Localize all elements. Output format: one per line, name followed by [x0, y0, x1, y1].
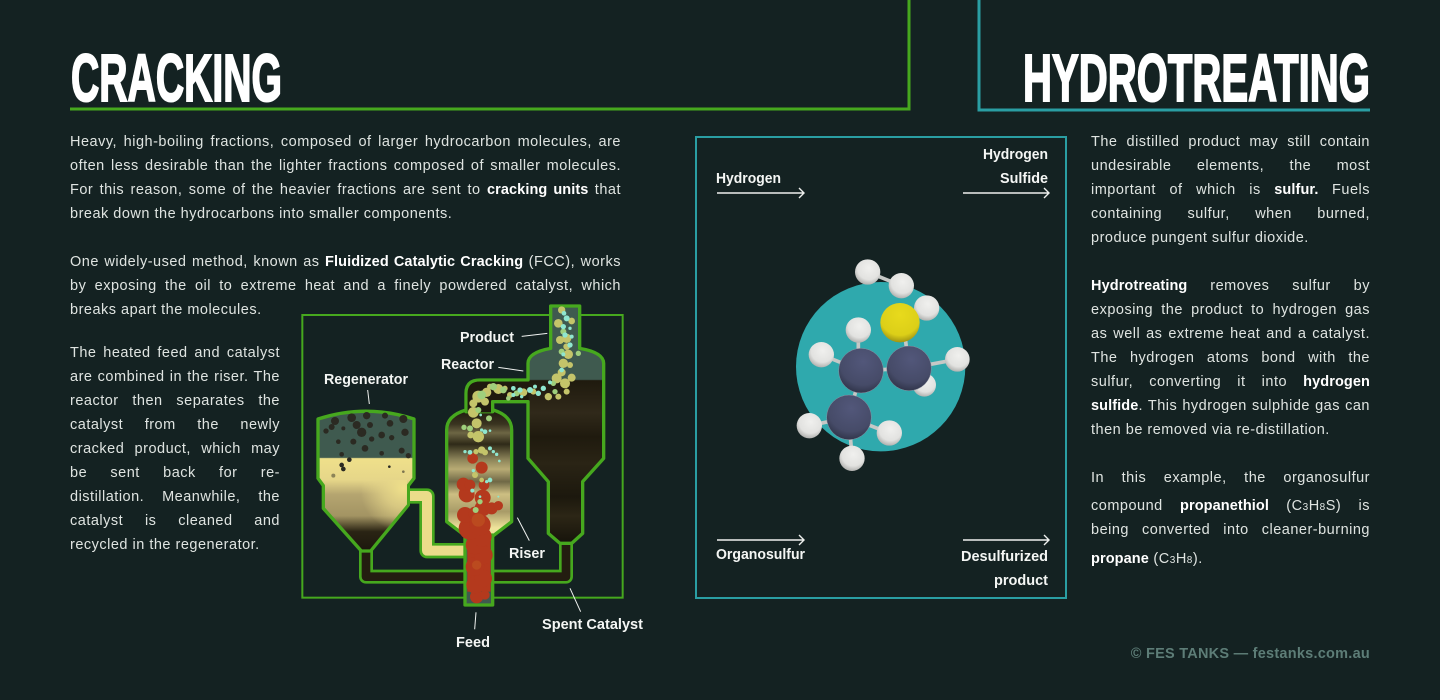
- text block: cracking introduction: often less desirable than the lighter fractions composed of smaller molecules.: [70, 158, 621, 174]
- text block: sulfur problem: undesirable elements, the most: [1091, 158, 1370, 174]
- title: cracking: CRACKING: [71, 41, 282, 116]
- label: desulfurized product output: Desulfurized: [961, 549, 1048, 565]
- text block: propanethiol example: In this example, the organosulfur: [1091, 470, 1370, 486]
- molecule bonds: [809, 272, 957, 458]
- label: hydrogen sulfide output: Sulfide: [1000, 171, 1048, 187]
- text block: riser and reactor: cracked product, which may: [70, 441, 280, 457]
- text block: sulfur problem: [1091, 134, 1370, 246]
- carbon atoms: [827, 346, 931, 440]
- text block: hydrotreating process: sulfide. This hydrogen sulphide gas can: [1091, 398, 1370, 414]
- label: product: Product: [460, 330, 514, 346]
- arrow: organosulfur input: [717, 535, 804, 545]
- label: spent catalyst: Spent Catalyst: [542, 617, 643, 633]
- leader lines: [368, 333, 581, 629]
- text block: riser and reactor: recycled in the regenerator.: [70, 537, 260, 553]
- text block: sulfur problem: containing sulfur, when burned,: [1091, 206, 1370, 222]
- text block: cracking introduction: break down the hydrocarbons into smaller components.: [70, 206, 452, 222]
- cyan product particles: [463, 311, 574, 498]
- text block: hydrotreating process: [1091, 278, 1370, 438]
- text block: riser and reactor: The heated feed and catalyst: [70, 345, 280, 361]
- text block: riser and reactor: distillation. Meanwhile, the: [70, 489, 280, 505]
- text block: cracking introduction: Heavy, high-boiling fractions, composed of larger hydrocarbon molecules, are: [70, 134, 621, 150]
- sulfur atom: [880, 303, 920, 342]
- riser crossover fill: [468, 382, 529, 412]
- text block: propanethiol example: compound propanethiol (C3H8S) is: [1091, 498, 1370, 514]
- text block: hydrotreating process: exposing the product to hydrogen gas: [1091, 302, 1370, 318]
- header rule: hydrotreating: [979, 0, 1370, 110]
- label: desulfurized product output: [961, 549, 1048, 589]
- text block: riser and reactor: be sent back for re-: [70, 465, 280, 481]
- text block: riser and reactor: reactor then separates the: [70, 393, 280, 409]
- label: feed: Feed: [456, 635, 490, 651]
- text block: hydrotreating process: then be removed via re-distillation.: [1091, 422, 1330, 438]
- header rule: cracking: [70, 0, 909, 109]
- text block: riser and reactor: [70, 345, 280, 553]
- text block: sulfur problem: The distilled product may still contain: [1091, 134, 1370, 150]
- text block: hydrotreating process: sulfur, converting it into hydrogen: [1091, 374, 1370, 390]
- text block: propanethiol example: being converted into cleaner-burning: [1091, 522, 1370, 538]
- arrow: hydrogen sulfide output: [963, 188, 1049, 198]
- label: hydrogen sulfide output: Hydrogen: [983, 147, 1048, 163]
- regenerator light band: [362, 480, 407, 531]
- label: reactor: Reactor: [441, 357, 494, 373]
- arrow: desulfurized product output: [963, 535, 1049, 545]
- text block: propanethiol example: propane (C3H8).: [1091, 551, 1203, 567]
- text block: hydrotreating process: as well as extreme heat and a catalyst.: [1091, 326, 1370, 342]
- riser pipe: [465, 535, 493, 605]
- arrow: hydrogen input: [717, 188, 804, 198]
- text block: sulfur problem: produce pungent sulfur dioxide.: [1091, 230, 1309, 246]
- label: hydrogen input: Hydrogen: [716, 171, 781, 187]
- label: hydrogen sulfide output: [983, 147, 1048, 187]
- text block: riser and reactor: are combined in the riser. The: [70, 369, 280, 385]
- footer credit: © FES TANKS — festanks.com.au: [1131, 646, 1370, 662]
- hydrogen atoms: [797, 259, 970, 471]
- olive product particles: [467, 306, 576, 482]
- text block: fluidized catalytic cracking: by exposing the oil to extreme heat and a finely powdered catalyst, which: [70, 278, 621, 294]
- text block: riser and reactor: catalyst is cleaned and: [70, 513, 280, 529]
- regenerator catalyst particles: [323, 412, 411, 478]
- text block: hydrotreating process: The hydrogen atoms bond with the: [1091, 350, 1370, 366]
- illustration: propanethiol molecule: [796, 259, 970, 471]
- text block: cracking introduction: [70, 134, 621, 222]
- green product particles: [461, 329, 581, 513]
- reactor separator vessel: [466, 306, 604, 543]
- label: organosulfur input: Organosulfur: [716, 547, 805, 563]
- dark red feed highlights: [472, 513, 485, 570]
- label: regenerator: Regenerator: [324, 372, 408, 388]
- spent catalyst pipe: [366, 538, 566, 577]
- label: desulfurized product output: product: [994, 573, 1048, 589]
- text block: propanethiol example: [1091, 470, 1370, 567]
- regenerator vessel: [318, 411, 414, 551]
- panel frame: [696, 137, 1066, 598]
- vessels and pipes: [302, 306, 623, 629]
- diagram frame: [302, 315, 623, 598]
- reactor riser chamber: [447, 410, 512, 536]
- text block: riser and reactor: catalyst from the newly: [70, 417, 280, 433]
- regenerated catalyst pipe: [405, 496, 468, 551]
- red feed particles: [457, 453, 503, 603]
- teal backdrop circle: [796, 282, 965, 451]
- panel: hydrotreating reaction: [696, 137, 1066, 598]
- text block: sulfur problem: important of which is sulfur. Fuels: [1091, 182, 1370, 198]
- text block: fluidized catalytic cracking: [70, 254, 621, 318]
- text block: fluidized catalytic cracking: breaks apart the molecules.: [70, 302, 262, 318]
- text block: fluidized catalytic cracking: One widely-used method, known as Fluidized Catalytic Cracking (FCC), works: [70, 254, 621, 270]
- text block: hydrotreating process: Hydrotreating removes sulfur by: [1091, 278, 1370, 294]
- text block: cracking introduction: For this reason, some of the heavier fractions are sent to cracking units that: [70, 182, 621, 198]
- diagram: fluidized catalytic cracking unit: [302, 306, 643, 651]
- label: riser: Riser: [509, 546, 545, 562]
